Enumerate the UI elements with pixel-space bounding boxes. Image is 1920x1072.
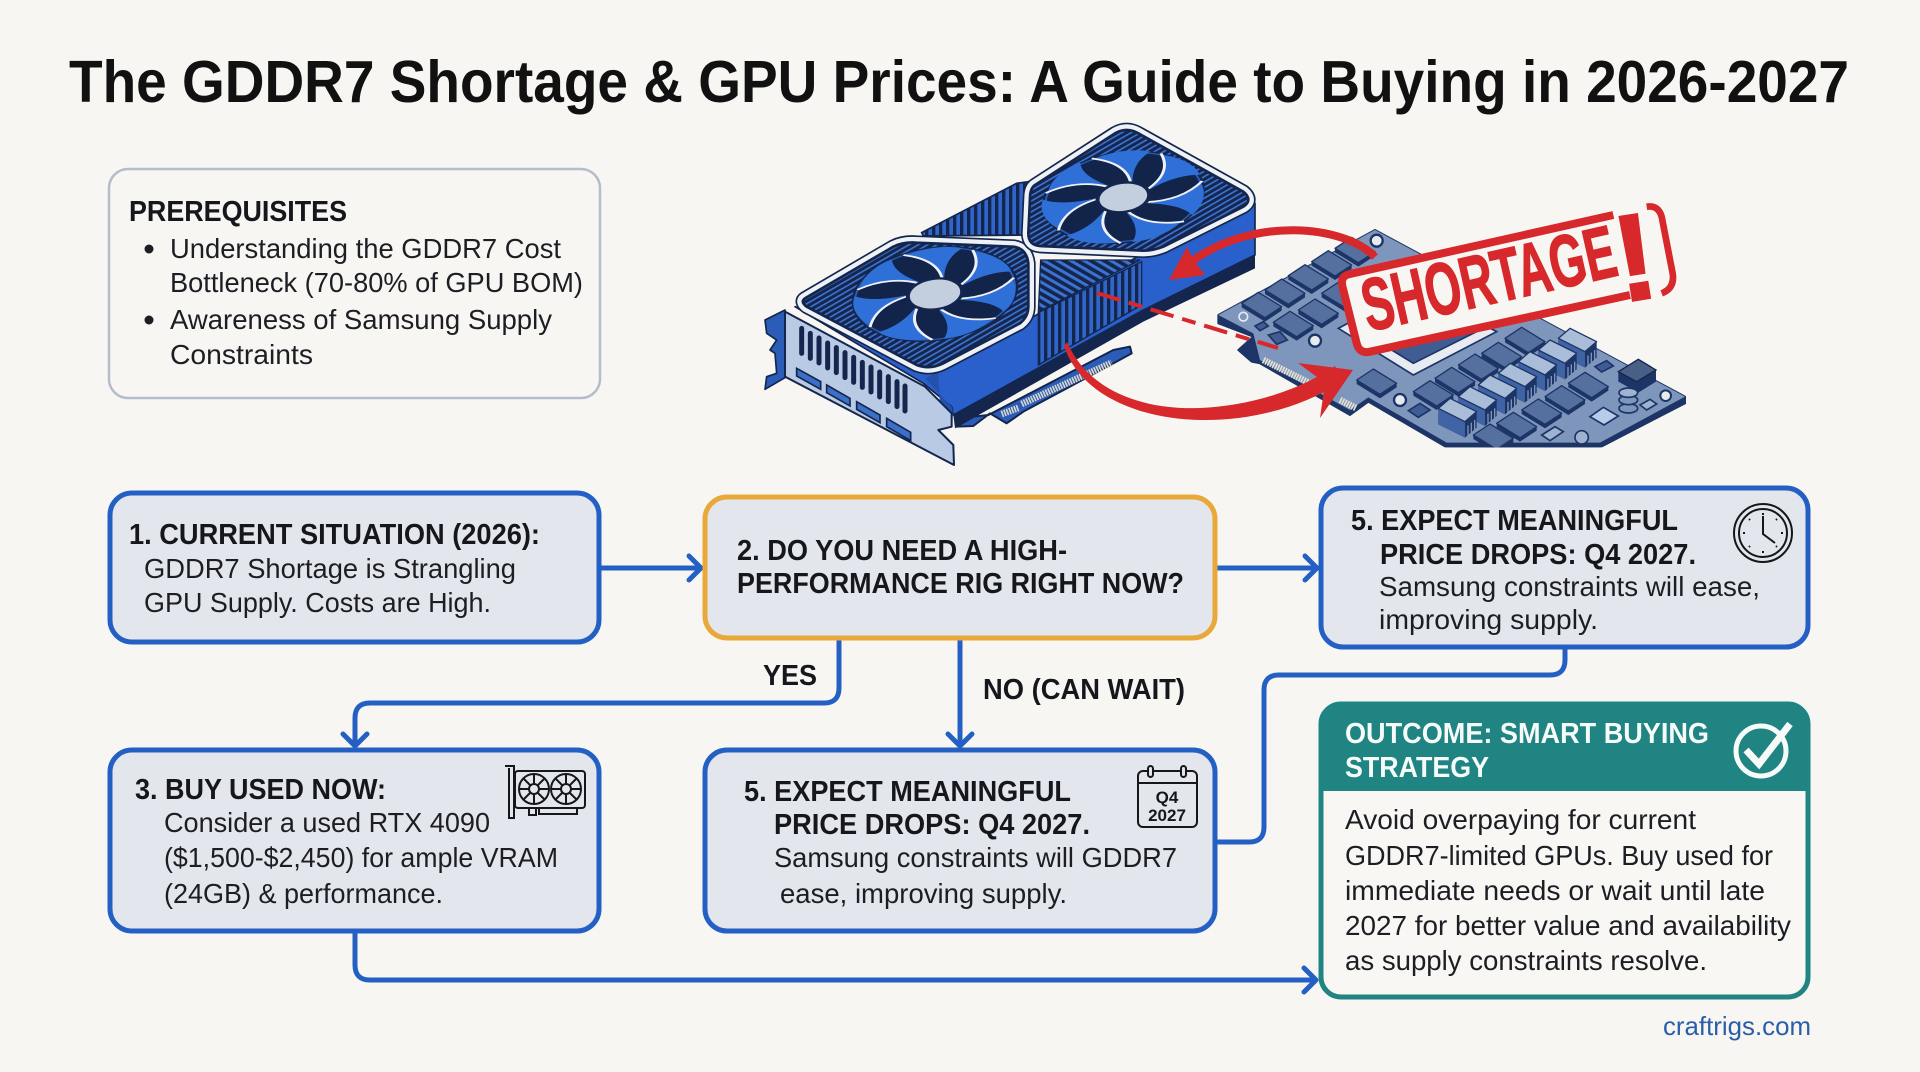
panel: outcome: immediate needs or wait until late (1345, 875, 1765, 906)
panel: step 5 price drops top: Samsung constraints will ease, (1379, 571, 1760, 602)
icon: check mark (1736, 724, 1790, 776)
stamp: shortage: ! (1604, 186, 1666, 329)
panel: prerequisites: PREREQUISITES (129, 196, 347, 228)
arrow: red dashed line (1097, 293, 1278, 348)
panel: step 3 buy used: Consider a used RTX 4090 (164, 807, 490, 838)
stamp: shortage: SHORTAGE (1354, 210, 1624, 347)
panel: prerequisites: Bottleneck (70-80% of GPU BOM) (170, 267, 583, 298)
arrow: red upper curved arrow (1169, 230, 1375, 280)
panel: outcome: GDDR7-limited GPUs. Buy used for (1345, 840, 1773, 871)
panel: step 1 current situation: GDDR7 Shortage is Strangling (144, 553, 516, 584)
arrow: step 1 to step 2 (600, 556, 701, 580)
panel: step 5 price drops bottom: Samsung constraints will GDDR7 (774, 842, 1177, 873)
icon: right fan (1016, 125, 1232, 265)
panel: step 5 price drops top: improving supply. (1379, 604, 1598, 635)
panel: step 2 decision: PERFORMANCE RIG RIGHT NOW? (737, 568, 1184, 600)
icon: clock (1734, 504, 1792, 562)
icon: left fan (827, 222, 1044, 361)
illustration: memory circuit board (1218, 230, 1685, 453)
panel: prerequisites (109, 169, 600, 398)
panel: step 2 decision (705, 497, 1215, 638)
label: yes: YES (763, 660, 817, 692)
illustration: graphics card (765, 125, 1255, 465)
panel: outcome: 2027 for better value and availability (1345, 910, 1791, 941)
panel: step 5 price drops bottom: PRICE DROPS: Q4 2027. (774, 809, 1090, 841)
bracket (765, 310, 954, 465)
panel: outcome: OUTCOME: SMART BUYING (1345, 718, 1709, 750)
panel: step 5 price drops bottom: ease, improving supply. (780, 878, 1067, 909)
footer: source credit: craftrigs.com (1663, 1011, 1811, 1041)
panel: step 3 buy used: (24GB) & performance. (164, 878, 443, 909)
connector: step 5 boxes (1216, 649, 1565, 842)
panel: step 5 price drops bottom (705, 750, 1215, 931)
arrow: red lower curved arrow (1064, 342, 1353, 420)
stamp: shortage (1342, 186, 1673, 352)
label: no can wait: NO (CAN WAIT) (983, 674, 1185, 706)
outcome header band (1321, 704, 1808, 791)
icon: calendar: Q4 (1156, 788, 1179, 807)
panel: step 5 price drops bottom: 5. EXPECT MEANINGFUL (744, 776, 1071, 808)
panel: step 3 buy used: ($1,500-$2,450) for ample VRAM (164, 842, 558, 873)
panel: step 5 price drops top: 5. EXPECT MEANINGFUL (1351, 505, 1678, 537)
panel: outcome: Avoid overpaying for current (1345, 804, 1696, 835)
panel: step 5 price drops top (1321, 488, 1808, 647)
panel: prerequisites: Constraints (170, 339, 313, 370)
panel: outcome: as supply constraints resolve. (1345, 945, 1707, 976)
icon: calendar (1138, 766, 1197, 827)
panel: step 1 current situation (110, 493, 599, 642)
icon: graphics card (505, 766, 585, 818)
panel: outcome: STRATEGY (1345, 752, 1489, 784)
panel: step 5 price drops top: PRICE DROPS: Q4 2027. (1380, 539, 1696, 571)
arrow: step 3 to outcome (355, 932, 1316, 992)
panel: step 1 current situation: 1. CURRENT SITUATION (2026): (129, 519, 540, 551)
panel: step 2 decision: 2. DO YOU NEED A HIGH- (737, 535, 1067, 567)
arrow: no branch (948, 639, 972, 746)
panel: prerequisites: Understanding the GDDR7 Cost (170, 233, 561, 264)
panel: step 1 current situation: GPU Supply. Costs are High. (144, 587, 491, 618)
panel: step 3 buy used: 3. BUY USED NOW: (135, 774, 386, 806)
arrow: step 2 to step 5 (1216, 556, 1317, 580)
arrow: yes branch (343, 639, 839, 746)
icon: calendar: 2027 (1148, 806, 1186, 825)
panel: prerequisites: Awareness of Samsung Supply (170, 304, 552, 335)
panel: outcome (1321, 704, 1808, 997)
panel: step 3 buy used (110, 750, 599, 931)
